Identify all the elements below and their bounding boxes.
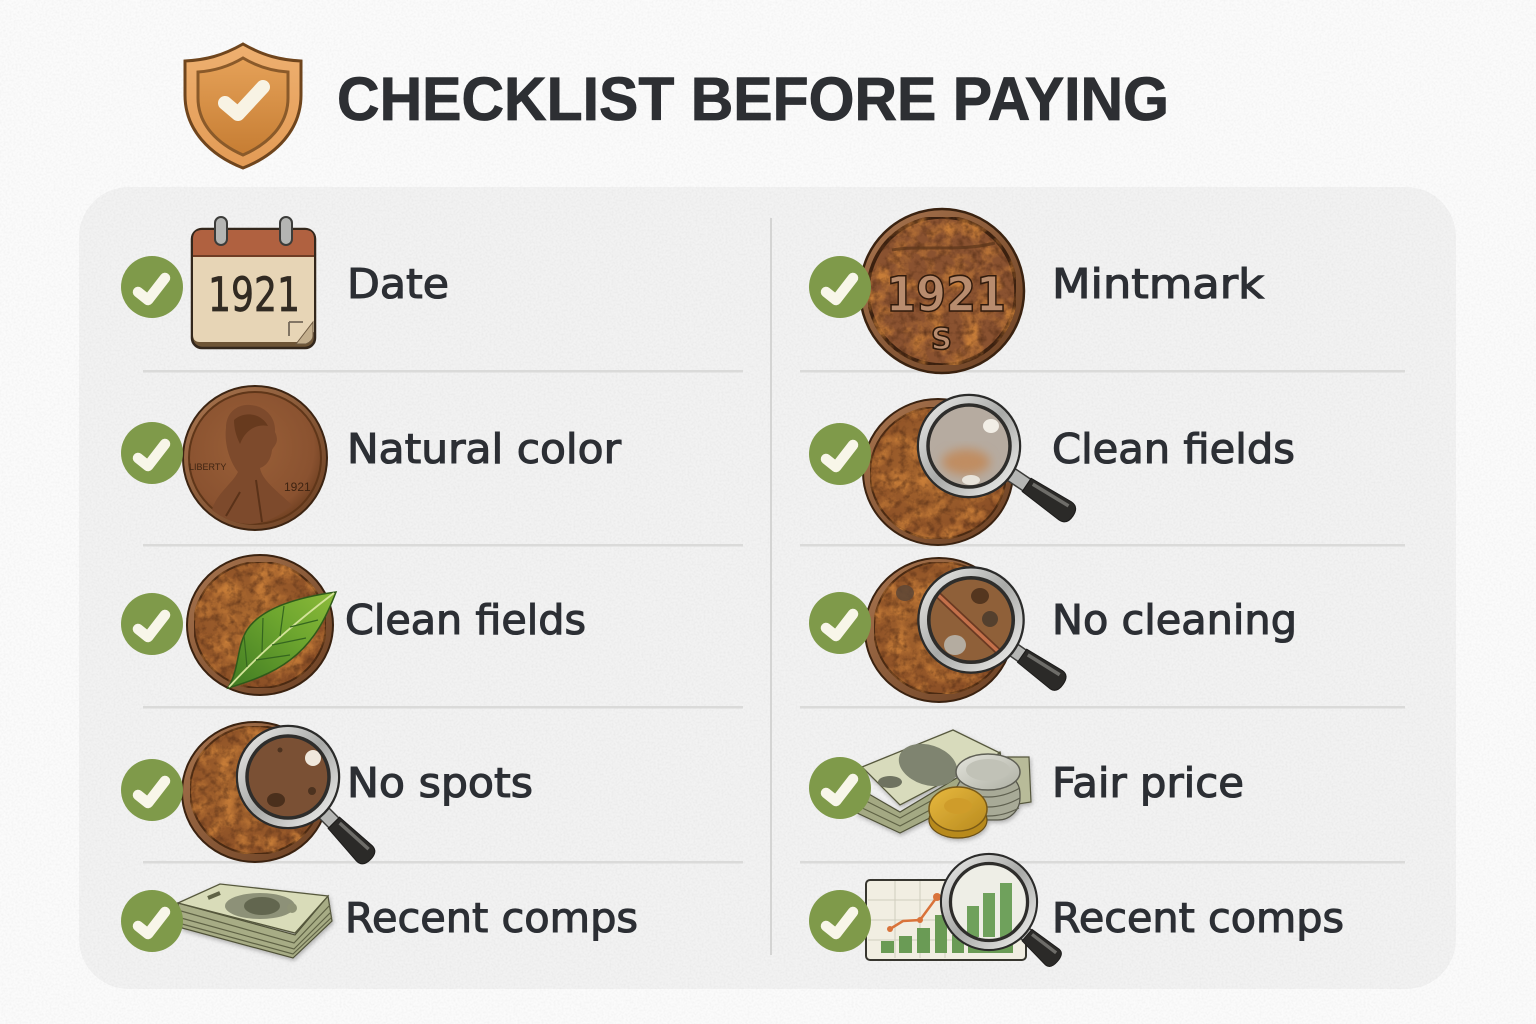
check badge	[121, 256, 183, 318]
icon: 1921 S coin: S	[931, 322, 952, 356]
check badge	[121, 890, 183, 952]
column divider	[770, 218, 772, 955]
row: no spots	[121, 722, 533, 867]
check badge	[809, 592, 871, 654]
panel: checklist card	[79, 187, 1456, 989]
row: recent comps chart	[809, 854, 1344, 969]
icon: coin with leaf	[187, 555, 336, 695]
icon: 1921 S coin: 1921	[886, 267, 1006, 323]
icon: penny portrait coin: LIBERTY	[189, 462, 226, 472]
row: mintmark	[809, 209, 1264, 373]
label: recent comps: Recent comps	[1052, 894, 1344, 942]
label: mintmark: Mintmark	[1052, 260, 1264, 308]
icon: calendar 1921	[192, 217, 315, 348]
row: recent comps cash	[121, 884, 638, 958]
row: clean fields leaf	[121, 555, 586, 695]
label: recent comps: Recent comps	[345, 894, 638, 942]
title: CHECKLIST BEFORE PAYING	[337, 65, 1169, 133]
icon: coin with magnifier spots	[182, 722, 378, 867]
icon: stack of banknotes	[178, 884, 332, 958]
label: clean fields: Clean fields	[345, 596, 586, 644]
icon: penny portrait coin	[183, 386, 327, 530]
label: no cleaning: No cleaning	[1052, 596, 1297, 644]
check badge	[809, 256, 871, 318]
check badge	[809, 423, 871, 485]
row: no cleaning	[809, 558, 1297, 702]
icon: shield with check	[185, 44, 301, 168]
icon: penny portrait coin: 1921	[284, 480, 311, 494]
check badge	[809, 890, 871, 952]
label: no spots: No spots	[347, 759, 533, 807]
icon: 1921 S coin	[860, 209, 1024, 373]
icon: coin with clean magnifier	[863, 395, 1079, 545]
label: natural color: Natural color	[347, 425, 621, 473]
row: date	[121, 217, 449, 348]
label: fair price: Fair price	[1052, 759, 1244, 807]
icon: chart with magnifier	[866, 854, 1064, 969]
label: clean fields: Clean fields	[1052, 425, 1295, 473]
icon: coin with scratched magnifier	[865, 558, 1069, 702]
icon: calendar 1921: 1921	[208, 268, 300, 323]
check badge	[121, 422, 183, 484]
row: clean fields magnifier	[809, 395, 1295, 545]
check badge	[121, 593, 183, 655]
label: date: Date	[347, 260, 449, 308]
row dividers	[143, 370, 1405, 864]
check badge	[809, 757, 871, 819]
check badge	[121, 759, 183, 821]
icon: cash and coins	[857, 730, 1031, 838]
row: natural color	[121, 386, 621, 530]
row: fair price	[809, 730, 1244, 838]
